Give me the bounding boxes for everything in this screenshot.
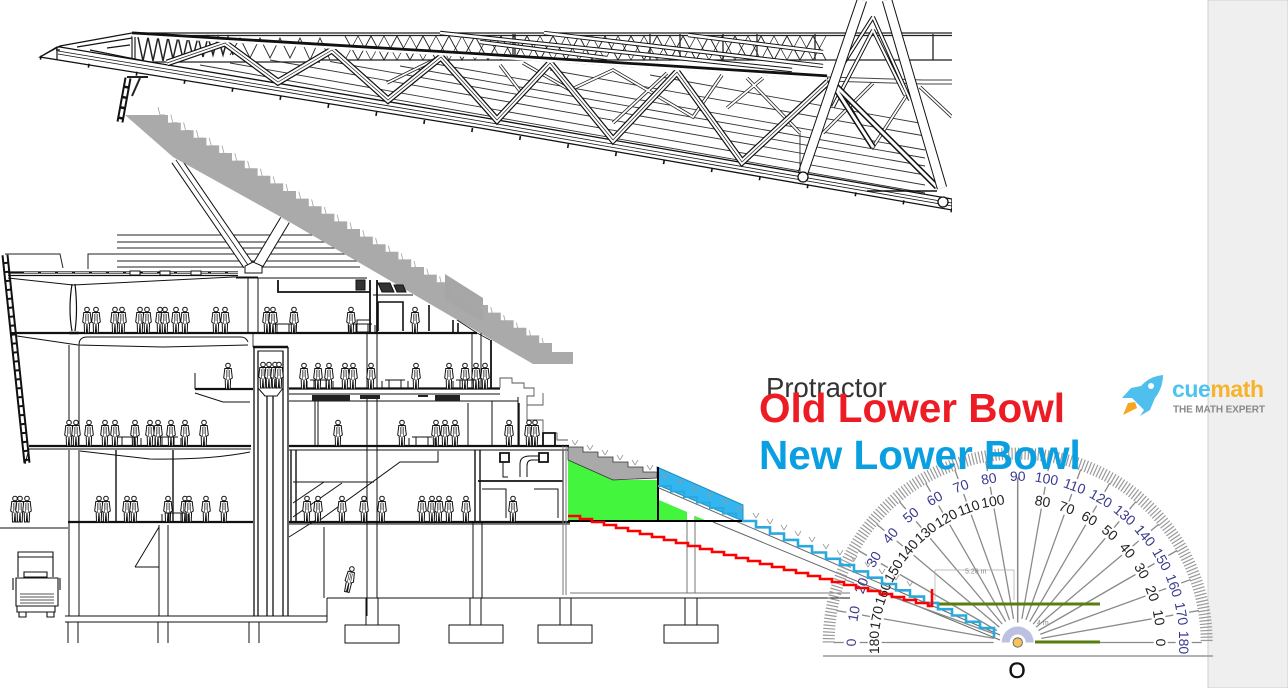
columns and walls: [65, 278, 850, 643]
outer scale: 180: [1176, 631, 1192, 654]
inner scale: 120: [932, 505, 960, 531]
cuemath logo: [1122, 375, 1265, 416]
dimension annotation: 5.26 m: [965, 568, 987, 576]
inner scale: 180: [866, 631, 882, 654]
beams under level two: [312, 395, 460, 401]
legend: new lower bowl: New Lower Bowl: [759, 432, 1081, 478]
inner scale: 60: [1079, 507, 1100, 529]
outer scale: 90: [1010, 468, 1026, 484]
upper stand wedge: [445, 274, 483, 322]
inner scale: 20: [1142, 583, 1163, 604]
lower bowl walls: [563, 446, 850, 595]
upper stand seats: [158, 107, 549, 346]
old lower bowl steps: [568, 516, 932, 606]
outer scale: 120: [1087, 486, 1115, 511]
stairs on level two edge: [500, 378, 568, 440]
secondary web: [387, 57, 952, 147]
new lower bowl steps: [742, 521, 994, 637]
degree tick band: [829, 454, 1207, 642]
inner scale: 0: [1153, 639, 1169, 647]
floor slabs: [8, 272, 570, 522]
building section: [0, 255, 850, 643]
outer scale: 20: [851, 575, 871, 596]
grey old terrace: [568, 447, 657, 480]
centre hub: [1002, 626, 1034, 647]
inner scale: 70: [1057, 497, 1077, 518]
lower bowl slab lines: [659, 488, 1000, 640]
plant room: [482, 433, 558, 518]
lower chord: [40, 33, 952, 210]
secondary chords: [440, 33, 823, 70]
inner scale: 130: [911, 519, 940, 546]
logo wordmark: cuemath: [1172, 376, 1264, 402]
outer scale: 40: [879, 524, 901, 547]
main top chord: [132, 34, 952, 84]
outer scale: 140: [1132, 521, 1159, 550]
inner scale: 30: [1131, 560, 1153, 582]
logo tagline: THE MATH EXPERT: [1173, 404, 1265, 416]
inner scale: 160: [871, 580, 894, 607]
outer scale: 0: [843, 638, 859, 646]
seat marks: [572, 440, 913, 586]
mast pin joints: [798, 172, 948, 207]
inner scale: 100: [980, 491, 1006, 511]
dimension annotation: 4 m: [1037, 620, 1049, 627]
people and furniture: [11, 307, 539, 593]
outer scale: 110: [1061, 475, 1088, 497]
green infill: [568, 460, 707, 521]
inner scale: 50: [1099, 521, 1121, 544]
outer scale: 170: [1172, 601, 1192, 627]
main web zigzag: [167, 43, 830, 162]
outer scale: 50: [900, 504, 922, 526]
point label O: O: [1008, 658, 1026, 683]
purlins: [200, 60, 925, 193]
dimension annotation: [935, 568, 1049, 627]
mast: [800, 0, 942, 188]
side panel: [1208, 0, 1288, 688]
core and lift: [253, 333, 288, 616]
thin slabs and ceilings: [0, 271, 570, 616]
inner scale: 110: [955, 496, 982, 519]
upper rooms: [278, 280, 458, 333]
roof hanger: [120, 77, 148, 122]
protractor: [829, 454, 1207, 654]
outer scale: 10: [844, 604, 863, 623]
outer scale: [843, 468, 1192, 654]
inner scale: 40: [1116, 539, 1139, 562]
roof truss drawing: [40, 0, 952, 210]
radial spokes: [834, 461, 1202, 642]
inner scale: 10: [1150, 609, 1168, 627]
heading: Protractor: Protractor: [766, 372, 887, 403]
inner scale: 80: [1034, 492, 1052, 510]
outer scale: 150: [1149, 545, 1175, 574]
upper stand concrete: [125, 115, 573, 364]
facade: [5, 255, 27, 463]
protractor baseline: [823, 655, 1213, 657]
outer scale: 60: [924, 487, 945, 509]
inner scale: 140: [894, 536, 922, 564]
rear truss: [132, 33, 952, 62]
legend: old lower bowl: Old Lower Bowl: [759, 385, 1065, 431]
bus: [13, 552, 60, 617]
outer scale: 30: [863, 548, 884, 570]
foundations: [345, 598, 718, 643]
inner scale: [866, 491, 1169, 654]
blue new seating block: [657, 467, 743, 521]
upper stand struts: [176, 160, 285, 273]
outer scale: 80: [980, 469, 998, 488]
green reference bars: [938, 604, 1100, 642]
stairs: [289, 451, 438, 537]
outer scale: 100: [1034, 469, 1060, 488]
outer scale: 160: [1163, 572, 1186, 599]
outer scale: 70: [951, 476, 971, 496]
icon: rocket: [1122, 375, 1163, 416]
outer scale: 130: [1111, 501, 1139, 529]
inner scale: 150: [881, 556, 906, 585]
rear roof lines: [5, 235, 360, 269]
inner scale: 170: [866, 604, 886, 630]
